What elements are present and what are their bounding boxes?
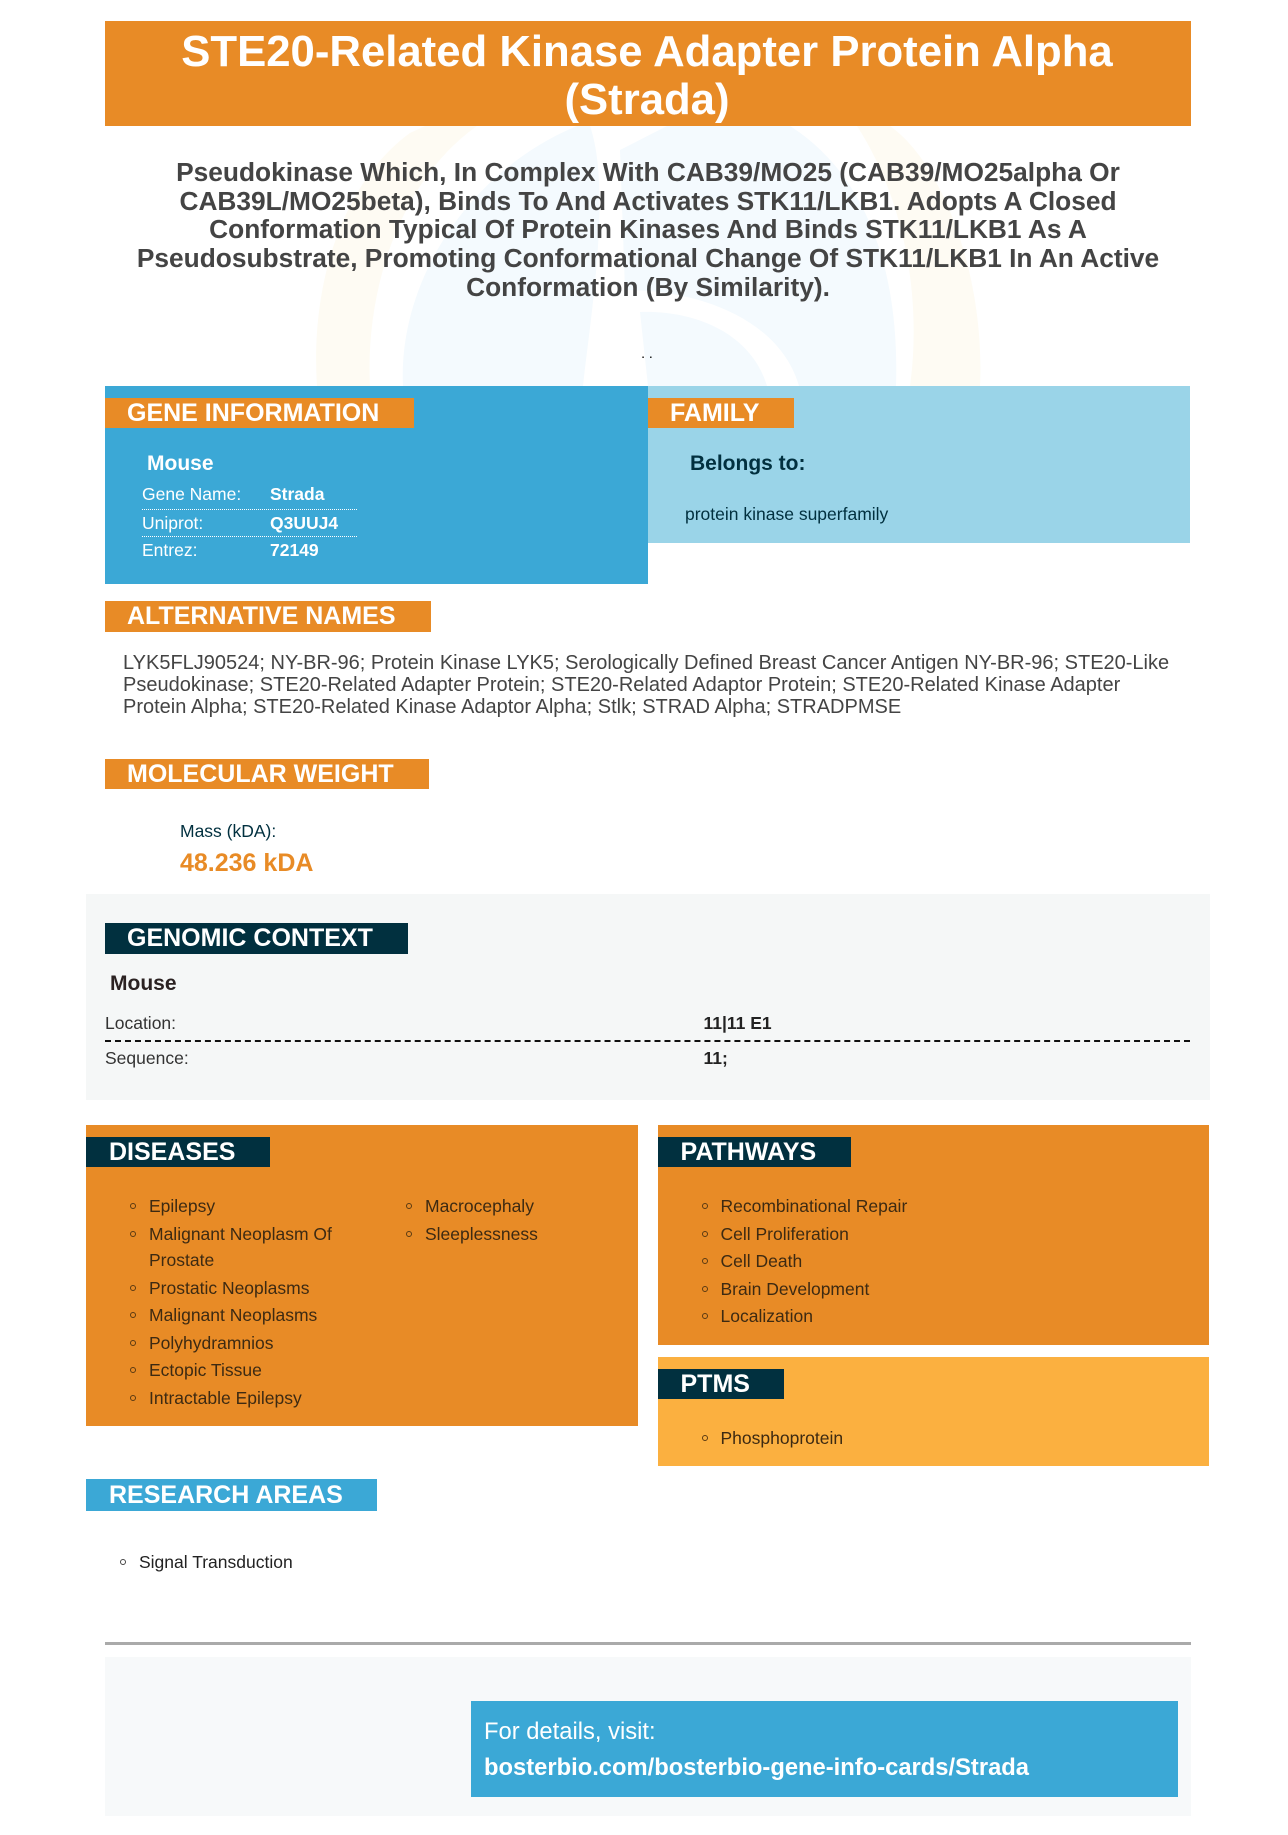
entrez row: 72149 [270, 540, 319, 560]
disease list column 1: Ectopic Tissue [149, 1360, 262, 1380]
panel: pathways [658, 1125, 1209, 1345]
location row: Location: [105, 1013, 176, 1033]
location row: 11|11 E1 [704, 1013, 772, 1033]
research area list: Signal Transduction [139, 1552, 293, 1572]
disease list column 1: Prostate [149, 1250, 214, 1270]
summary text: Conformation Typical Of Protein Kinases And Binds STK11/LKB1 As A [209, 214, 1087, 244]
heading: gene information: GENE INFORMATION [127, 399, 379, 427]
summary text: Conformation (By Similarity). [466, 272, 830, 302]
heading: family: FAMILY [670, 399, 759, 427]
summary text: CAB39L/MO25beta), Binds To And Activates STK11/LKB1. Adopts A Closed [179, 186, 1117, 216]
title banner: STE20-Related Kinase Adapter Protein Alpha [181, 27, 1113, 76]
heading: alternative names: ALTERNATIVE NAMES [127, 602, 396, 630]
callout: details link: bosterbio.com/bosterbio-gene-info-cards/Strada [484, 1754, 1029, 1781]
heading: family [648, 398, 794, 428]
heading: ptms: PTMS [680, 1370, 750, 1398]
alternative names text [123, 652, 1169, 718]
summary text [137, 157, 1159, 302]
callout: details link: For details, visit: [484, 1718, 656, 1745]
uniprot row: Q3UUJ4 [270, 513, 338, 533]
alternative names text: Protein Alpha; STE20-Related Kinase Adaptor Alpha; Stlk; STRAD Alpha; STRADPMSE [123, 696, 901, 718]
sequence row: Sequence: [105, 1048, 189, 1068]
uniprot row [142, 509, 357, 537]
sequence row: 11; [704, 1048, 728, 1068]
sequence row [105, 1048, 728, 1068]
heading: diseases [86, 1137, 270, 1167]
gene name row [142, 480, 357, 510]
dashed divider [105, 1040, 1190, 1042]
location row [105, 1013, 772, 1033]
species label: Mouse [110, 972, 177, 995]
background watermark [316, 126, 980, 386]
disease list column 1: Polyhydramnios [149, 1333, 274, 1353]
species label: Mouse [147, 452, 214, 475]
panel: ptms [658, 1357, 1209, 1466]
entrez row [142, 540, 319, 560]
heading: research areas: RESEARCH AREAS [109, 1481, 343, 1509]
disease list column 1: Malignant Neoplasm Of [149, 1224, 332, 1244]
separator dots: . . [641, 345, 653, 361]
panel: genomic context [86, 894, 1210, 1100]
pathway list: Cell Death [720, 1251, 802, 1271]
mass label: Mass (kDA): [180, 821, 276, 841]
alternative names text: Pseudokinase; STE20-Related Adapter Protein; STE20-Related Adaptor Protein; STE20-Related Kinase Adapter [123, 674, 1120, 696]
heading: pathways: PATHWAYS [680, 1138, 816, 1166]
pathway list: Cell Proliferation [720, 1224, 849, 1244]
ptm list: Phosphoprotein [720, 1428, 843, 1448]
title banner [105, 21, 1191, 126]
summary text: Pseudosubstrate, Promoting Conformational Change Of STK11/LKB1 In An Active [137, 243, 1159, 273]
callout: details link [471, 1701, 1178, 1797]
family value: protein kinase superfamily [685, 504, 888, 524]
disease list column 1: Prostatic Neoplasms [149, 1278, 309, 1298]
summary text: Pseudokinase Which, In Complex With CAB39/MO25 (CAB39/MO25alpha Or [176, 157, 1120, 187]
pathway list [702, 1196, 908, 1326]
heading: ptms [658, 1369, 784, 1399]
entrez row: Entrez: [142, 540, 197, 560]
pathway list: Localization [720, 1306, 813, 1326]
panel: family [648, 386, 1190, 543]
belongs to label: Belongs to: [690, 452, 806, 475]
gene name row: Gene Name: [142, 484, 241, 504]
disease list column 2: Sleeplessness [425, 1224, 538, 1244]
disease list column 1: Malignant Neoplasms [149, 1305, 317, 1325]
title banner: (Strada) [564, 75, 730, 124]
heading: diseases: DISEASES [109, 1138, 235, 1166]
mass value: 48.236 kDA [180, 849, 313, 877]
alternative names text: LYK5FLJ90524; NY-BR-96; Protein Kinase LYK5; Serologically Defined Breast Cancer Antigen NY-BR-96; STE20-Like [123, 652, 1169, 674]
heading: molecular weight: MOLECULAR WEIGHT [127, 760, 394, 788]
panel: diseases [86, 1125, 638, 1426]
gene name row: Strada [270, 484, 324, 504]
pathway list: Recombinational Repair [720, 1196, 907, 1216]
panel: gene information [105, 386, 648, 584]
panel: footer [105, 1657, 1191, 1816]
disease list column 1: Intractable Epilepsy [149, 1388, 302, 1408]
pathway list: Brain Development [720, 1279, 869, 1299]
disease list column 2 [406, 1196, 538, 1244]
disease list column 1 [130, 1196, 332, 1408]
disease list column 1: Epilepsy [149, 1196, 215, 1216]
heading: genomic context: GENOMIC CONTEXT [127, 924, 373, 952]
heading: pathways [658, 1137, 851, 1167]
uniprot row: Uniprot: [142, 513, 203, 533]
footer divider [105, 1642, 1191, 1645]
disease list column 2: Macrocephaly [425, 1196, 534, 1216]
